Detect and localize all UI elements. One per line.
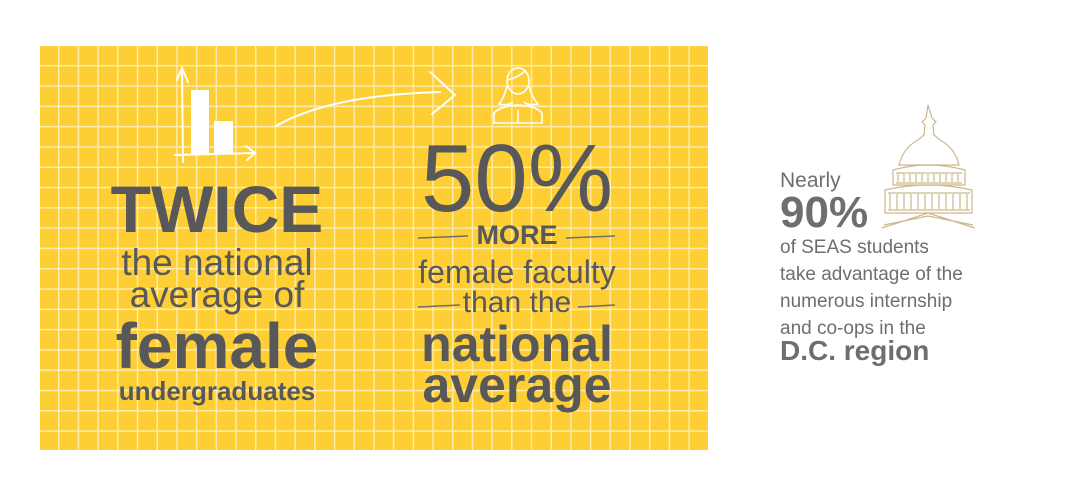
text: MORE (476, 220, 558, 250)
text: TWICE (111, 172, 323, 246)
text: Nearly (780, 169, 841, 192)
text block: 50% more (418, 125, 616, 413)
text: female (116, 310, 318, 382)
text: than the (463, 286, 571, 319)
text: take advantage of the (780, 264, 963, 285)
text: average of (130, 274, 304, 315)
text: national (421, 316, 613, 372)
text: average (422, 357, 612, 413)
text: 50% (421, 125, 613, 232)
text: numerous internship (780, 291, 952, 312)
text: and co-ops in the (780, 318, 926, 339)
text: D.C. region (780, 335, 929, 366)
text: female faculty (418, 254, 616, 290)
text: undergraduates (119, 376, 315, 406)
text block: twice (111, 172, 323, 406)
text: 90% (780, 188, 868, 237)
text: the national (121, 242, 313, 283)
text block: 90% internships (780, 169, 963, 366)
text: of SEAS students (780, 237, 929, 258)
